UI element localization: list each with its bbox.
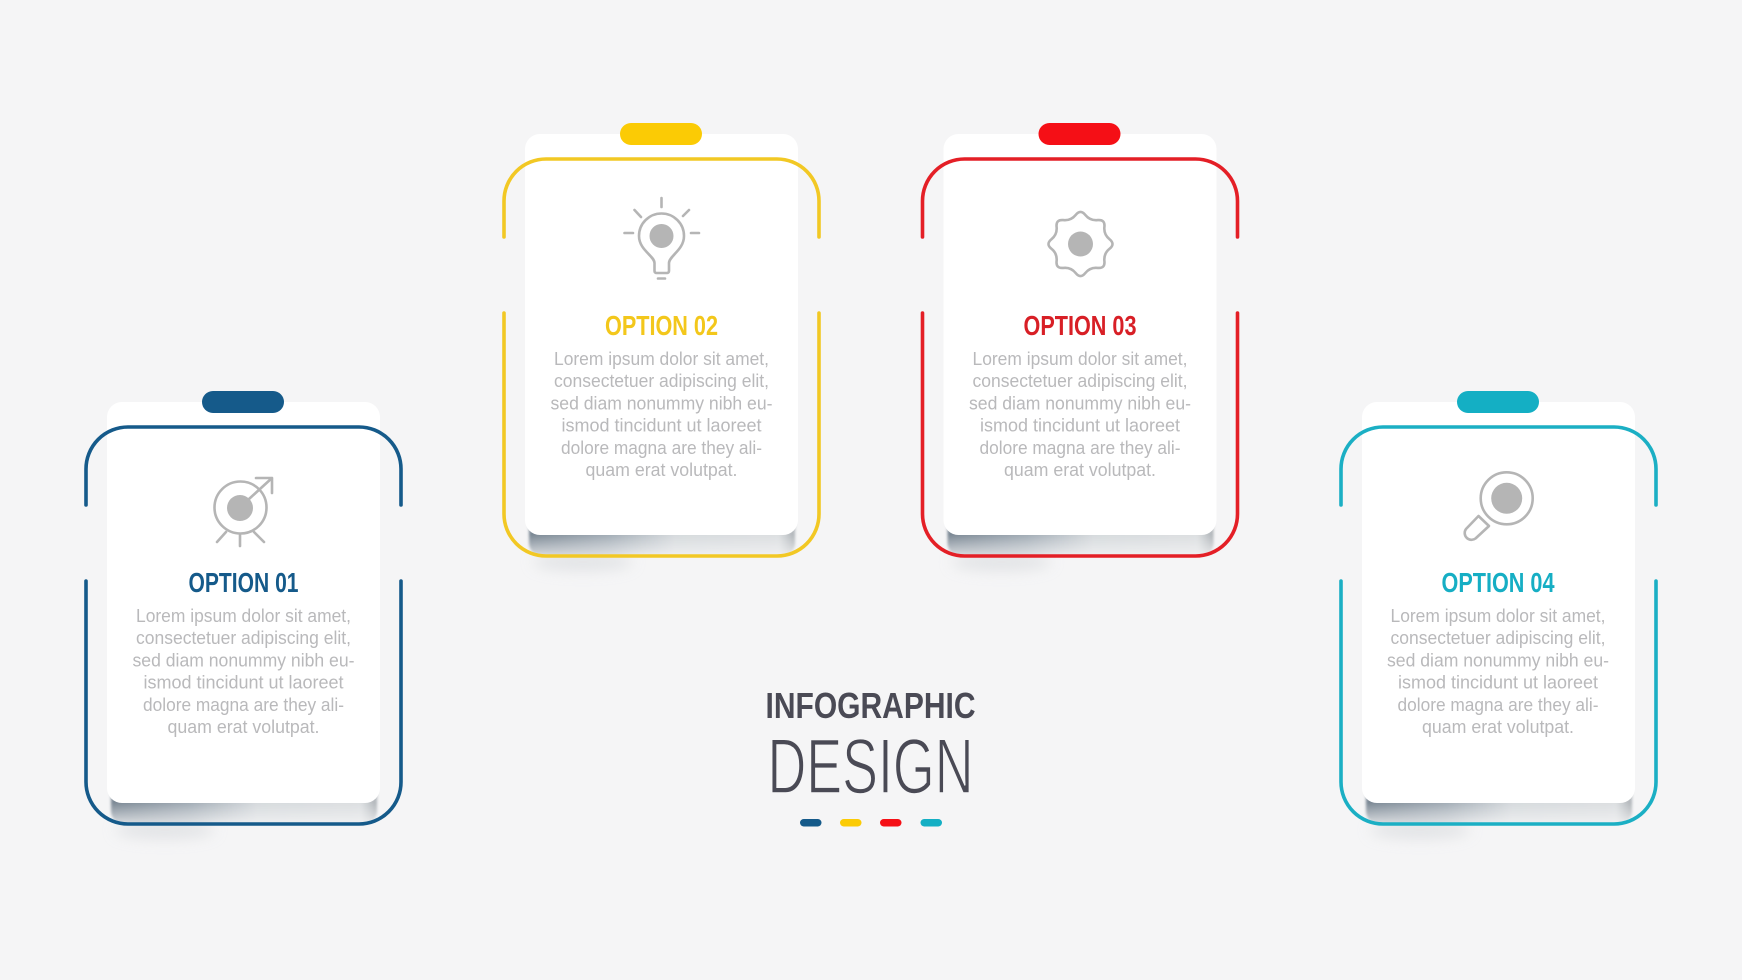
outline frame 03	[922, 159, 1238, 556]
tab 02	[620, 123, 702, 145]
title	[766, 685, 976, 810]
body text 03: consectetuer adipiscing elit,	[972, 370, 1188, 391]
body text 02: quam erat volutpat.	[586, 459, 738, 480]
white card 01	[107, 402, 380, 803]
panel: option 02	[504, 123, 819, 571]
white card 03	[944, 134, 1216, 535]
body text 03: Lorem ipsum dolor sit amet,	[972, 348, 1188, 369]
body text 03: quam erat volutpat.	[1004, 459, 1156, 480]
icon: target with arrow	[214, 478, 272, 546]
panel: option 03	[922, 123, 1238, 571]
body text 03: dolore magna are they ali-	[980, 437, 1180, 458]
heading option 04: OPTION 04	[1442, 567, 1555, 598]
body text 03: ismod tincidunt ut laoreet	[980, 415, 1180, 436]
body text 04: dolore magna are they ali-	[1398, 694, 1598, 715]
body text 03: sed diam nonummy nibh eu-	[969, 392, 1191, 413]
icon: light bulb	[624, 198, 699, 278]
body text 04: Lorem ipsum dolor sit amet,	[1390, 605, 1606, 626]
outline frame 02	[504, 159, 819, 556]
body text 01: dolore magna are they ali-	[143, 694, 344, 715]
tab 04	[1457, 391, 1539, 413]
body text 02: sed diam nonummy nibh eu-	[550, 392, 772, 413]
icon: gear	[1048, 212, 1113, 276]
body text 01: Lorem ipsum dolor sit amet,	[136, 605, 351, 626]
tab 01	[202, 391, 284, 413]
heading option 03: OPTION 03	[1024, 310, 1136, 341]
panel: option 04	[1341, 391, 1656, 839]
body text 02: consectetuer adipiscing elit,	[554, 370, 769, 391]
body text 01	[132, 605, 354, 737]
title line: design: DESIGN	[768, 722, 974, 810]
colour key dots	[800, 819, 942, 826]
heading option 02: OPTION 02	[605, 310, 718, 341]
card shadow 02	[527, 527, 796, 572]
body text 04: sed diam nonummy nibh eu-	[1387, 649, 1609, 670]
body text 01: consectetuer adipiscing elit,	[136, 627, 351, 648]
outline frame 01	[86, 427, 401, 824]
card shadow 03	[946, 527, 1215, 572]
body text 03	[969, 348, 1191, 480]
body text 02: Lorem ipsum dolor sit amet,	[554, 348, 769, 369]
body text 04: consectetuer adipiscing elit,	[1390, 627, 1606, 648]
tab 03	[1038, 123, 1120, 145]
white card 04	[1362, 402, 1635, 803]
title line: infographic: INFOGRAPHIC	[766, 685, 976, 726]
body text 04: ismod tincidunt ut laoreet	[1398, 672, 1598, 693]
body text 02	[550, 348, 772, 480]
body text 04	[1387, 605, 1609, 737]
body text 01: ismod tincidunt ut laoreet	[144, 672, 344, 693]
body text 02: ismod tincidunt ut laoreet	[562, 415, 762, 436]
white card 02	[525, 134, 798, 535]
card shadow 04	[1364, 795, 1634, 840]
outline frame 04	[1341, 427, 1656, 824]
body text 02: dolore magna are they ali-	[561, 437, 762, 458]
body text 01: quam erat volutpat.	[168, 716, 320, 737]
body text 04: quam erat volutpat.	[1422, 716, 1574, 737]
body text 01: sed diam nonummy nibh eu-	[132, 649, 354, 670]
heading option 01: OPTION 01	[188, 567, 298, 598]
panel: option 01	[86, 391, 401, 839]
card shadow 01	[109, 795, 378, 840]
icon: magnifier	[1465, 472, 1533, 540]
